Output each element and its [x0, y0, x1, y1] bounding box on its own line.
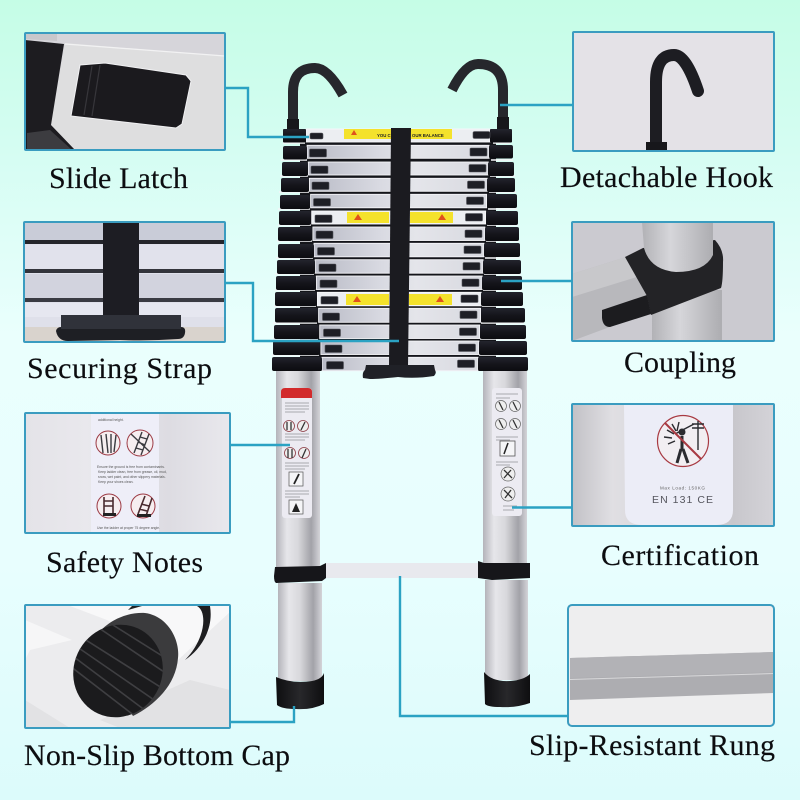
label: detachable hook: Detachable Hook	[560, 161, 773, 194]
panel: safety notes photo: Keep ladder clean, free from grease, oil, mud,	[98, 470, 167, 474]
icon: electrical hazard prohibition	[658, 416, 708, 466]
connector: securing strap	[225, 283, 399, 341]
warning stickers	[344, 129, 453, 305]
connector: slip-resistant rung	[400, 576, 568, 716]
panel border: certification	[572, 404, 774, 526]
panel: non-slip bottom cap photo	[25, 605, 230, 734]
right collars	[478, 129, 528, 371]
panel border: non-slip bottom cap	[25, 605, 230, 728]
panel border: detachable hook	[573, 32, 774, 151]
bottom rung	[326, 563, 478, 578]
label: coupling: Coupling	[624, 346, 736, 379]
left bottom cap	[276, 673, 324, 709]
right warning label	[492, 388, 522, 516]
left hook	[287, 68, 343, 129]
connector: detachable hook	[500, 104, 573, 106]
connector: certification	[512, 506, 572, 509]
panel: safety notes photo: Keep your shoes clean.	[98, 480, 133, 484]
panel border: securing strap	[24, 222, 225, 342]
panel border: safety notes	[25, 413, 230, 533]
panel: safety notes photo: Ensure the ground is free from contaminants.	[97, 465, 165, 469]
panel: certification photo: Max Load: 150KG	[660, 486, 705, 490]
panel: safety notes photo: additional height.	[98, 418, 124, 422]
telescopic rungs	[272, 129, 526, 371]
warning stickers: OUR BALANCE	[412, 133, 444, 138]
left upper pole	[276, 370, 320, 567]
right lower pole	[485, 580, 528, 680]
panel: securing strap photo	[24, 222, 225, 342]
panel: safety notes photo: snow, wet paint, and other slippery materials.	[98, 475, 166, 479]
right hook	[452, 64, 509, 129]
panel: slide latch photo	[25, 33, 225, 150]
connector: non-slip bottom cap	[230, 706, 294, 722]
ladder illustration	[272, 64, 530, 709]
slide latches	[310, 132, 490, 369]
label: non-slip bottom cap: Non-Slip Bottom Cap	[24, 739, 290, 772]
label: safety notes: Safety Notes	[46, 546, 203, 579]
right bottom cap	[484, 672, 530, 707]
right upper pole	[483, 370, 527, 563]
connector: coupling	[501, 280, 572, 282]
panel: safety notes photo: Use the ladder at proper 75 degree angle.	[97, 526, 160, 530]
panel: slip-resistant rung photo	[568, 605, 774, 726]
connector: slide latch	[225, 88, 309, 137]
panel border: slide latch	[25, 33, 225, 150]
left collars	[272, 129, 322, 371]
panel: certification photo	[572, 404, 774, 526]
panel border: slip-resistant rung	[568, 605, 774, 726]
label: slide latch: Slide Latch	[49, 162, 188, 195]
connector: safety notes	[230, 444, 290, 446]
ladder back plate	[300, 129, 496, 371]
left lower pole	[278, 583, 322, 681]
panel: coupling photo	[572, 222, 774, 341]
right bottom coupling	[478, 561, 530, 580]
panel: safety notes photo	[25, 413, 230, 533]
left bottom coupling	[274, 563, 326, 583]
label: certification: Certification	[601, 539, 759, 572]
center securing strap	[389, 128, 411, 366]
panel: certification photo: EN 131 CE	[652, 494, 713, 506]
panel border: coupling	[572, 222, 774, 341]
label: slip-resistant rung: Slip-Resistant Rung	[529, 729, 775, 762]
strap handle	[363, 365, 436, 379]
panel: detachable hook photo	[573, 32, 774, 152]
label: securing strap: Securing Strap	[27, 352, 212, 385]
left warning label	[281, 388, 312, 518]
warning stickers: YOU C	[377, 133, 391, 138]
